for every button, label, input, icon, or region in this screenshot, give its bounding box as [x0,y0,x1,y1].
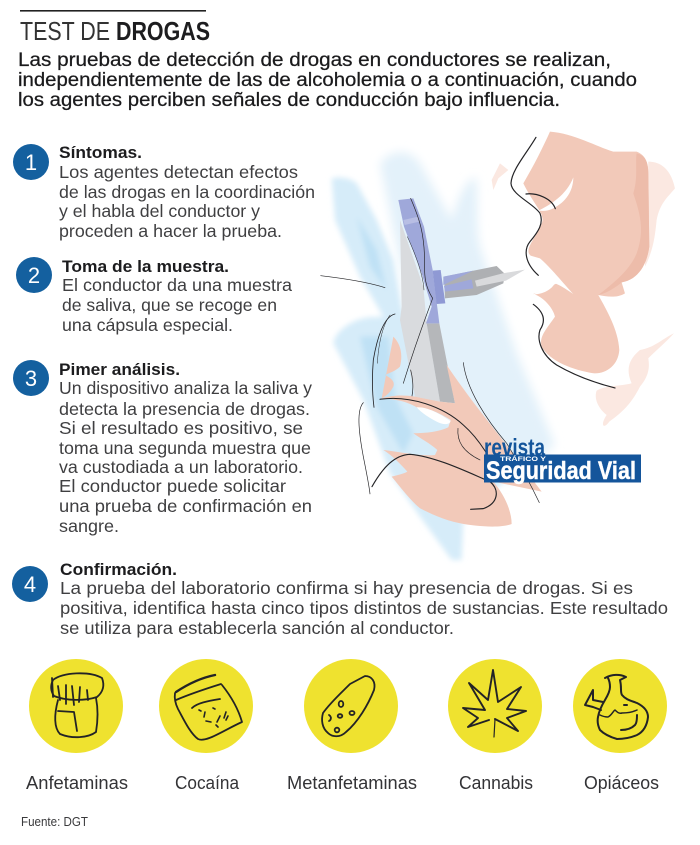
label: Anfetaminas: Anfetaminas [26,772,128,793]
label: Cannabis: Cannabis [459,772,533,793]
step 1 text [59,143,315,241]
label: Metanfetaminas: Metanfetaminas [287,772,417,793]
hand [321,276,542,527]
intro text: Las pruebas de detección de drogas en conductores se realizan, [18,50,611,71]
device [398,198,525,403]
badge 1: 1 [25,150,37,175]
step 4: Confirmación [12,560,668,638]
step 3 text: Si el resultado es positivo, se [59,418,303,438]
badge 4: 4 [24,572,36,597]
step 1 text: y el habla del conductor y [59,201,260,221]
pale skin washes [492,162,675,426]
badge 3 [13,360,49,396]
step 2 text: Toma de la muestra. [62,257,229,276]
title: TEST DE DROGAS [20,16,210,46]
step 3 text: Un dispositivo analiza la saliva y [59,378,312,398]
badge 2 [16,257,52,293]
intro text: independientemente de las de alcoholemia o a continuación, cuando [18,70,637,91]
icon: cocaína bag [159,659,253,753]
step 4 text [60,560,668,638]
step 3 text: detecta la presencia de drogas. [59,399,310,419]
step 1 text: Los agentes detectan efectos [59,162,298,182]
intro text [18,50,637,111]
label: Cocaína: Cocaína [175,772,240,793]
badge 4 [12,566,48,602]
icon: cannabis leaf [448,659,542,753]
icon: anfetaminas jar [29,659,123,753]
step 2 text: una cápsula especial. [62,315,233,335]
step 1 text: proceden a hacer la prueba. [59,221,282,241]
badge 3: 3 [25,366,37,391]
step 1 text: de las drogas en la coordinación [59,182,315,202]
step 2 text: de saliva, que se recoge en [62,295,277,315]
face [511,132,649,388]
source: Fuente: DGT [21,814,88,829]
label: Opiáceos: Opiáceos [584,772,659,793]
logo: Revista Tráfico y Seguridad Vial: Seguridad Vial [486,457,636,485]
badge 1 [13,144,49,180]
logo: Revista Tráfico y Seguridad Vial: TRÁFICO Y [500,456,546,463]
step 4 text: Confirmación. [60,560,177,579]
step 1 text: Síntomas. [59,143,142,162]
illustration: saliva test on a face [321,132,675,560]
icon: opiáceos flask [573,659,667,753]
step 3 text: va custodiada a un laboratorio. [59,457,303,477]
step 3 text: El conductor puede solicitar [59,476,286,496]
badge 2: 2 [28,263,40,288]
step 3 text: toma una segunda muestra que [59,438,311,458]
step 3 text: Pimer análisis. [59,360,180,379]
step 3 text: una prueba de confirmación en [59,496,312,516]
step 2: Toma de la muestra [16,257,292,335]
logo: Revista Tráfico y Seguridad Vial: revista [484,434,546,462]
step 2 text: El conductor da una muestra [62,275,292,295]
step 3 text [59,360,312,536]
step 3: Pimer análisis [13,360,312,536]
step 2 text [62,257,292,335]
intro text: los agentes perciben señales de conducción bajo influencia. [18,90,560,111]
step 4 text: positiva, identifica hasta cinco tipos distintos de sustancias. Este resultado [60,598,668,618]
logo: Revista Tráfico y Seguridad Vial [484,434,641,485]
step 3 text: sangre. [59,516,119,536]
step 4 text: se utiliza para establecerla sanción al conductor. [60,618,454,638]
icon: metanfetaminas pill [304,659,398,753]
blue watercolor wash [332,152,555,560]
step 1: Síntomas [13,143,315,241]
step 4 text: La prueba del laboratorio confirma si hay presencia de drogas. Si es [60,578,633,598]
